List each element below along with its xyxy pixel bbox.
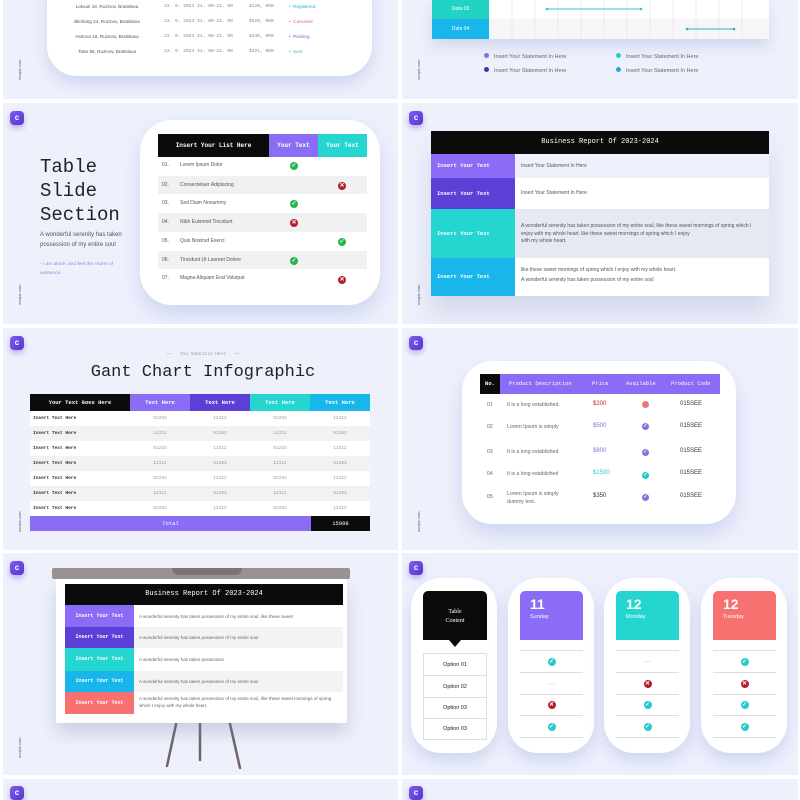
table rows: It is a long established	[507, 471, 558, 477]
icon: badge	[10, 336, 24, 350]
table rows: Tincidunt Ut Laoreet Dolore	[180, 256, 241, 262]
table: gantt data: 12312	[333, 506, 347, 511]
text block: quote: - I am alone, and feel the charm of existence.	[40, 262, 113, 276]
table: business report: Insert Your Text	[437, 273, 490, 280]
title: Gant Chart Infographic	[91, 363, 315, 382]
icon: badge: c	[15, 788, 19, 797]
icon: badge	[10, 111, 24, 125]
table: gantt data: 12312	[153, 491, 167, 496]
card: sunday: ✕	[549, 702, 554, 708]
table: gantt data: 12312	[333, 446, 347, 451]
table: business report: A wonderful serenity has taken possession of my entire soul	[521, 276, 654, 282]
table rows: $800	[593, 448, 606, 454]
table rows: Consectetuer Adipiscing	[180, 182, 234, 188]
card: monday: 12	[626, 596, 642, 612]
panel: gant chart infographic: ooopic.com	[17, 512, 22, 532]
table: gantt data: Your Text Goes Here	[49, 399, 111, 406]
table rows	[487, 400, 702, 505]
table header: Business Report Of 2023-2024	[541, 138, 659, 146]
table: gantt data: %1283	[273, 446, 287, 451]
title	[40, 156, 120, 226]
icon: badge	[10, 561, 24, 575]
panel: product table: ooopic.com	[416, 512, 421, 532]
table: gantt data: 12312	[273, 431, 287, 436]
panel: business report (right)	[402, 103, 798, 324]
table: gantt data: 12312	[273, 461, 287, 466]
table: gantt data: 12312	[213, 476, 227, 481]
table rows: Lorem Ipsum is simply	[507, 424, 559, 430]
table rows: 02	[487, 424, 493, 430]
table: gantt data: 12312	[213, 416, 227, 421]
table rows: $200	[593, 401, 606, 407]
card: monday: Monday	[626, 614, 646, 620]
card: monday: ✓	[645, 702, 650, 708]
icon: badge: c	[414, 338, 418, 347]
table rows: ✓	[643, 472, 648, 478]
panel: delivery table (top-left)	[3, 0, 398, 99]
legend: Insert Your Statement In Here	[626, 68, 698, 74]
table: gantt data: Text Here	[145, 399, 175, 406]
table: gantt data: %1283	[153, 446, 167, 451]
table rows: ✓	[643, 494, 648, 500]
text block: delivery rows: 23. 9. 2024 21. 00-21. 00	[164, 49, 233, 54]
table rows	[158, 162, 367, 284]
icon: badge	[409, 561, 423, 575]
table rows: 05	[487, 494, 493, 500]
text block: delivery rows: $520, 000	[249, 19, 274, 24]
panel: gantt timeline (top-right): ooopic.com	[416, 60, 421, 80]
text block: delivery rows: $421, 000	[249, 49, 274, 54]
panel: next slide right (partial)	[402, 779, 798, 800]
table header	[158, 134, 367, 157]
icon: badge	[409, 336, 423, 350]
card: table content: Option 02	[443, 684, 467, 690]
panel: easel business report	[3, 553, 398, 775]
card: monday: ✓	[645, 724, 650, 730]
board: report table	[56, 579, 347, 723]
icon: badge: c	[414, 788, 418, 797]
icon: badge: c	[15, 113, 19, 122]
text block: delivery rows: 23. 9. 2024 21. 00-21. 00	[164, 34, 233, 39]
table rows: 03	[487, 449, 493, 455]
table rows: ✕	[339, 183, 345, 189]
table: gantt data: %1283	[213, 491, 227, 496]
legend: Insert Your Statement In Here	[494, 54, 566, 60]
icon: badge	[10, 786, 24, 800]
table rows: Magna Aliquam Erat Volutpat	[180, 275, 244, 281]
card: table content: Table	[448, 609, 462, 615]
table: gantt data: 12312	[213, 446, 227, 451]
table header	[431, 131, 769, 154]
card: sunday: —	[548, 680, 554, 686]
table: gantt data: Insert Text Here	[33, 446, 76, 451]
title: Table	[40, 156, 97, 178]
card: table content: Option 01	[443, 662, 467, 668]
table rows: ✓	[643, 449, 648, 455]
text block: delivery rows: • Canceled	[289, 19, 313, 24]
table rows: 015SEE	[680, 470, 702, 476]
card: tuesday: ✕	[742, 680, 747, 686]
table rows: 04	[487, 471, 493, 477]
table rows: 015SEE	[680, 448, 702, 454]
table rows: It is a long established.	[507, 402, 560, 408]
table rows: 015SEE	[680, 493, 702, 499]
table: gantt data: %1283	[213, 461, 227, 466]
table rows: ✓	[339, 239, 345, 245]
panel: pricing-style comparison	[402, 553, 798, 775]
icon: badge	[409, 111, 423, 125]
table: gantt data: %1283	[273, 416, 287, 421]
table: gantt data: Text Here	[265, 399, 295, 406]
board: report table: Insert Your Text	[75, 634, 124, 640]
table header: Your Text	[277, 142, 310, 149]
panel: table slide section: ooopic.com	[17, 285, 22, 305]
table rows: ✕	[339, 277, 345, 283]
table: business report: Insert Your Statement In Here	[521, 163, 587, 169]
text block: delivery rows: $120, 000	[249, 4, 274, 9]
easel legs	[166, 723, 242, 770]
table: gantt data: Insert Text Here	[33, 491, 76, 496]
table: business report: A wonderful serenity has taken possession of my entire soul, like these sweet mornings of spring which I enjoy with my whole heart. like these sweet mornings of spring which I enjoy	[521, 223, 751, 236]
table header	[480, 374, 720, 394]
table: gantt data: Insert Text Here	[33, 461, 76, 466]
chart: gantt rows	[432, 0, 769, 39]
table: gantt data: %1283	[153, 506, 167, 511]
icon: badge: c	[15, 338, 19, 347]
easel top bar	[52, 568, 350, 579]
table: business report: Insert Your Text	[437, 230, 490, 237]
table rows: $500	[593, 423, 606, 429]
card: monday: ✕	[645, 680, 650, 686]
table: gantt data: %1283	[213, 431, 227, 436]
table: gantt data: Text Here	[205, 399, 235, 406]
table: gantt data: 12312	[333, 416, 347, 421]
card: table content	[411, 578, 497, 753]
card: delivery list	[47, 0, 372, 76]
table rows: Nibh Euismod Tincidunt	[180, 219, 233, 225]
table: gantt data: %1283	[273, 506, 287, 511]
board: report table: Insert Your Text	[75, 613, 124, 619]
table: gantt data	[30, 394, 370, 531]
table rows: 03.	[162, 200, 169, 206]
card: sunday	[508, 578, 594, 753]
board: report table: A wonderful serenity has taken possession of my entire soul, like these sweet mornings of spring which I enjoy with my whole heart.	[139, 696, 331, 708]
card: sunday: Sunday	[530, 614, 549, 620]
table rows: 02.	[162, 182, 169, 188]
title: Section	[40, 204, 120, 226]
table rows: Sed Diam Nonummy	[180, 200, 226, 206]
chart: gantt rows: Data 03	[452, 6, 469, 12]
card: tuesday: ✓	[742, 702, 747, 708]
board: report table: A wonderful serenity has taken possession of my entire soul	[139, 635, 258, 640]
icon: badge	[409, 786, 423, 800]
table: gantt data: 12312	[213, 506, 227, 511]
card: product table	[462, 361, 736, 524]
chart: gantt rows: Data 04	[452, 26, 469, 32]
board: report table: Insert Your Text	[75, 700, 124, 706]
board: report table: A wonderful serenity has taken possession of my entire soul	[139, 679, 258, 684]
table: gantt data: Insert Text Here	[33, 416, 76, 421]
table rows: ✕	[291, 220, 297, 226]
text block: delivery rows: 23. 9. 2024 21. 00-21. 00	[164, 4, 233, 9]
total row	[30, 516, 370, 531]
text block: delivery rows: Astrova 18, Ruzinov, Bratislava	[75, 34, 139, 39]
table header: Insert Your List Here	[176, 142, 251, 149]
panel: business report (right): ooopic.com	[416, 285, 421, 305]
panel: product table	[402, 328, 798, 550]
text block: delivery rows	[74, 4, 316, 54]
table rows: 015SEE	[680, 401, 702, 407]
text block: delivery rows: $430, 000	[249, 34, 274, 39]
table header: Product Code	[671, 380, 711, 387]
table: gantt data: %1283	[273, 476, 287, 481]
card: check table	[140, 120, 380, 305]
board: report table: Business Report Of 2023-2024	[145, 590, 263, 598]
table rows: 015SEE	[680, 423, 702, 429]
table header: Your Text	[326, 142, 359, 149]
card: tuesday: 12	[723, 596, 739, 612]
panel: table slide section	[3, 103, 398, 324]
card: monday	[604, 578, 690, 753]
board: report table: Insert Your Text	[75, 678, 124, 684]
icon: badge: c	[15, 563, 19, 572]
card: table content: Option 03	[443, 726, 467, 732]
table header: Available	[626, 380, 656, 387]
table: business report: with my whole heart.	[521, 238, 567, 244]
card: table content: Content	[446, 618, 464, 624]
table rows: 05.	[162, 238, 169, 244]
table rows: 04.	[162, 219, 169, 225]
panel: easel business report: ooopic.com	[17, 738, 22, 758]
panel: delivery table (top-left): ooopic.com	[17, 60, 22, 80]
table: gantt data: %1283	[333, 491, 347, 496]
legend: Insert Your Statement In Here	[494, 68, 566, 74]
table header: Price	[592, 380, 609, 387]
card: sunday: 11	[530, 596, 545, 612]
table rows: 07.	[162, 275, 169, 281]
subtitle: —— You Subtitle Here ——	[167, 352, 239, 357]
table rows: $1500	[593, 470, 610, 476]
table rows: 06.	[162, 256, 169, 262]
total row: Total	[162, 520, 179, 527]
table: business report: Insert Your Text	[437, 162, 490, 169]
table rows: ✓	[291, 163, 297, 169]
board: report table: A wonderful serenity has taken possession of my entire soul, like these sweet	[139, 614, 293, 619]
table: gantt data: Insert Text Here	[33, 431, 76, 436]
text block: description: A wonderful serenity has taken possession of my entire soul	[40, 232, 122, 248]
panel: gant chart infographic	[3, 328, 398, 550]
table: gantt data: Insert Text Here	[33, 476, 76, 481]
legend: Insert Your Statement In Here	[626, 54, 698, 60]
table rows: ✓	[291, 258, 297, 264]
table: business report: like these sweet mornings of spring which I enjoy with my whole heart.	[521, 267, 676, 273]
panel: gantt timeline (top-right)	[402, 0, 798, 99]
icon: badge: c	[414, 563, 418, 572]
table: gantt data: %1283	[333, 461, 347, 466]
table header: Product Description	[509, 380, 572, 387]
table rows: It is a long established	[507, 449, 558, 455]
text block: delivery rows: Blimbing 24, Ruzinov, Bratislava	[74, 19, 140, 24]
table: business report: Insert Your Statement In Here	[521, 190, 587, 196]
text block: delivery rows: Tidar 56, Ruzinov, Bratislava	[78, 49, 136, 54]
board: report table: A wonderful serenity has taken possession	[139, 657, 224, 662]
table rows: ✓	[643, 423, 648, 429]
table: gantt data: %1283	[153, 416, 167, 421]
text block: delivery rows: • Registered	[289, 4, 315, 9]
board: report table: Insert Your Text	[75, 656, 124, 662]
table: gantt data: 12312	[153, 431, 167, 436]
legend	[484, 53, 698, 74]
card: tuesday: Tuesday	[723, 614, 744, 620]
text block: delivery rows: • Packing	[289, 34, 310, 39]
table: business report: Insert Your Text	[437, 190, 490, 197]
card: table content: Option 03	[443, 705, 467, 711]
table rows: 01	[487, 402, 493, 408]
table rows: ✓	[291, 201, 297, 207]
text block: delivery rows: Lokcari 18, Ruzinov, Bratislava	[76, 4, 138, 9]
table rows: dummy text.	[507, 499, 535, 505]
table rows: 01.	[162, 162, 169, 168]
table: gantt data: 12312	[333, 476, 347, 481]
text block: delivery rows: 23. 9. 2024 21. 00-21. 00	[164, 19, 233, 24]
icon: badge: c	[414, 113, 418, 122]
table: gantt data: Text Here	[325, 399, 355, 406]
table: business report	[431, 131, 769, 296]
table: gantt data: %1283	[333, 431, 347, 436]
card: tuesday: ✓	[742, 724, 747, 730]
panel: next slide left (partial)	[3, 779, 398, 800]
table header: No.	[485, 380, 495, 387]
card: sunday: ✓	[549, 724, 554, 730]
card: tuesday: ✓	[742, 658, 747, 664]
total row: 15998	[332, 520, 349, 527]
table rows: Lorem Ipsum Dolor	[180, 162, 223, 168]
text block: delivery rows: • Sent	[289, 49, 303, 54]
table rows: $350	[593, 493, 606, 499]
table rows: Quis Nostrud Exerci	[180, 238, 224, 244]
card: sunday: ✓	[549, 658, 554, 664]
title: Slide	[40, 180, 97, 202]
table rows: Lorem Ipsum is simply	[507, 491, 559, 497]
table: gantt data: %1283	[153, 476, 167, 481]
table: gantt data: 12312	[273, 491, 287, 496]
table: gantt data: Insert Text Here	[33, 506, 76, 511]
card: monday: —	[644, 658, 650, 664]
card: tuesday	[701, 578, 787, 753]
table: gantt data: 12312	[153, 461, 167, 466]
